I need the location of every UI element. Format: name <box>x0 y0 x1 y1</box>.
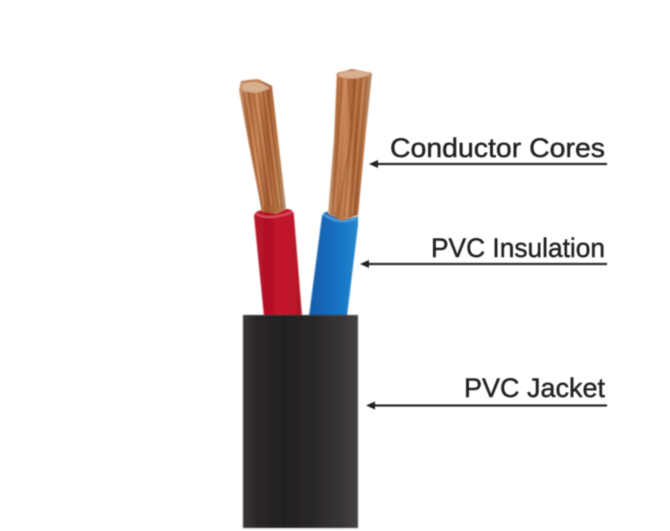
arrow: PVC insulation <box>360 260 607 268</box>
label: PVC jacket: PVC Jacket <box>464 373 605 403</box>
icon: red insulated wire <box>254 209 302 316</box>
icon: black PVC jacket <box>243 315 358 528</box>
icon: left copper conductor <box>239 79 286 214</box>
icon: blue insulated wire <box>309 212 358 316</box>
label: PVC insulation: PVC Insulation <box>431 233 605 263</box>
label: conductor cores: Conductor Cores <box>390 133 605 163</box>
arrow: PVC jacket <box>366 402 607 410</box>
arrow: conductor cores <box>369 160 607 168</box>
icon: right copper conductor <box>328 69 372 221</box>
